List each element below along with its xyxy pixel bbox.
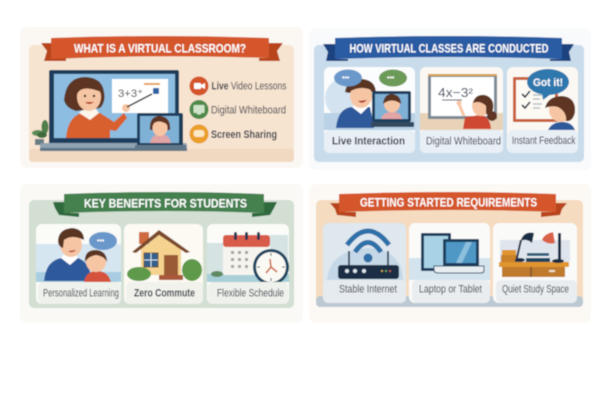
- speech bubbles: [334, 70, 407, 86]
- banner: getting started requirements: GETTING STARTED REQUIREMENTS: [360, 196, 537, 210]
- speech bubble: •••: [97, 238, 105, 245]
- whiteboard: 3+3⁺: [118, 88, 143, 100]
- tile: laptop or tablet: Laptop or Tablet: [419, 284, 482, 296]
- tile: zero commute: Zero Commute: [134, 288, 195, 300]
- tile: digital whiteboard: [420, 67, 503, 153]
- tile: digital whiteboard: Digital Whiteboard: [426, 136, 501, 148]
- icon: clock: [253, 249, 289, 285]
- tile: quiet study space: [493, 223, 577, 303]
- tile: quiet study space: Quiet Study Space: [502, 284, 569, 296]
- icon: wifi: [347, 231, 389, 260]
- icon: desk: [499, 250, 569, 277]
- list: screen sharing: [190, 124, 277, 144]
- tile: stable internet: Stable Internet: [339, 284, 397, 296]
- banner: how virtual classes are conducted: HOW VIRTUAL CLASSES ARE CONDUCTED: [350, 42, 549, 56]
- tile: instant feedback: [507, 67, 578, 153]
- tile: flexible schedule: Flexible Schedule: [217, 288, 284, 300]
- tile: instant feedback: Instant Feedback: [512, 135, 576, 147]
- laptop with student: [371, 91, 414, 127]
- icon: potted plant: [32, 120, 48, 145]
- teacher: [64, 77, 152, 138]
- banner: what is a virtual classroom: WHAT IS A VIRTUAL CLASSROOM?: [74, 42, 246, 56]
- panel: what is a virtual classroom: [20, 27, 303, 168]
- panel: getting started requirements: [309, 184, 591, 323]
- panel: how virtual classes are conducted: [309, 28, 591, 170]
- icon: router: [338, 251, 399, 279]
- checklist board: [513, 77, 558, 122]
- list: digital whiteboard: [190, 100, 286, 119]
- tile: personalized learning: Personalized Learning: [43, 288, 119, 300]
- speech bubbles: •••: [387, 75, 395, 82]
- tile: laptop or tablet: [409, 223, 490, 303]
- tablet with student: [135, 113, 186, 151]
- icon: tablet: [421, 233, 451, 271]
- icon: lamps: [515, 232, 564, 263]
- student from behind: [545, 96, 575, 130]
- icon: calendar: [223, 232, 270, 275]
- tile: personalized learning: [36, 224, 121, 304]
- girl drawing: [456, 95, 497, 129]
- banner: how virtual classes are conducted: [323, 36, 574, 61]
- speech bubbles: •••: [342, 75, 350, 82]
- list: live video lessons: Live Video Lessons: [212, 80, 287, 92]
- tile: flexible schedule: [207, 224, 289, 304]
- banner: key benefits for students: [53, 192, 277, 217]
- tile: digital whiteboard: 4x−3²: [438, 85, 474, 100]
- speech bubble: got it: Got it!: [533, 77, 563, 89]
- panel: key benefits for students: [20, 184, 303, 323]
- list: screen sharing: Screen Sharing: [211, 129, 277, 141]
- tile: zero commute: [124, 224, 203, 304]
- tile: live interaction: Live Interaction: [332, 136, 405, 148]
- list: digital whiteboard: Digital Whiteboard: [211, 104, 286, 116]
- tile: live interaction: [324, 67, 415, 153]
- icon: house: [127, 230, 202, 281]
- banner: key benefits for students: KEY BENEFITS FOR STUDENTS: [84, 196, 247, 210]
- banner: what is a virtual classroom: [41, 36, 283, 61]
- whiteboard: [112, 79, 168, 113]
- laptop with teacher: [40, 70, 187, 151]
- icon: laptop: [434, 239, 484, 273]
- tile: stable internet: [323, 223, 406, 303]
- list: live video lessons: [190, 76, 287, 96]
- banner: getting started requirements: [330, 192, 567, 217]
